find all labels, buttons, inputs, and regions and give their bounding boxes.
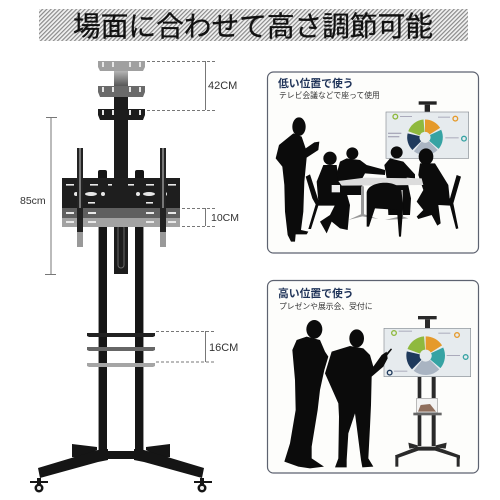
panel: low position <box>268 72 478 253</box>
two men silhouettes <box>284 320 392 468</box>
chairs <box>306 174 461 229</box>
standing man <box>276 117 319 242</box>
panel: high position <box>268 280 478 473</box>
uprights <box>98 170 144 452</box>
panel subtext: high position: プレゼンや展示会、受付に <box>279 301 373 311</box>
threaded studs <box>77 148 166 247</box>
meeting table <box>332 178 423 220</box>
dimension: 10CM: 10CM <box>211 212 239 224</box>
shelves <box>87 333 155 367</box>
dimension: 10CM <box>182 208 239 226</box>
panel subtext: low position: テレビ会議などで座って使用 <box>279 90 380 100</box>
dimension: 85cm: 85cm <box>20 195 46 207</box>
right man pointing <box>325 329 392 467</box>
ghost positions of top bracket <box>98 61 145 120</box>
panel heading: high position: 高い位置で使う <box>278 286 354 300</box>
screen with low mount <box>386 101 469 158</box>
left man <box>284 320 328 468</box>
scene: raised screen on stand <box>384 316 471 467</box>
front chair <box>367 183 403 237</box>
dimension: 16CM: 16CM <box>209 342 238 354</box>
centre column <box>114 109 128 274</box>
dimension: 42CM <box>147 61 237 110</box>
dimension: 42CM: 42CM <box>208 80 237 92</box>
seated people <box>317 146 450 233</box>
dimension: 16CM <box>156 331 238 362</box>
TV stand product <box>30 61 212 492</box>
scene: meeting silhouettes <box>276 117 461 242</box>
dimension: 85cm <box>20 117 57 274</box>
base with legs and casters <box>30 444 212 492</box>
mount plate with ghost positions <box>62 178 180 227</box>
title banner: 場面に合わせて高さ調節可能 <box>73 11 433 42</box>
panel heading: low position: 低い位置で使う <box>278 76 354 90</box>
